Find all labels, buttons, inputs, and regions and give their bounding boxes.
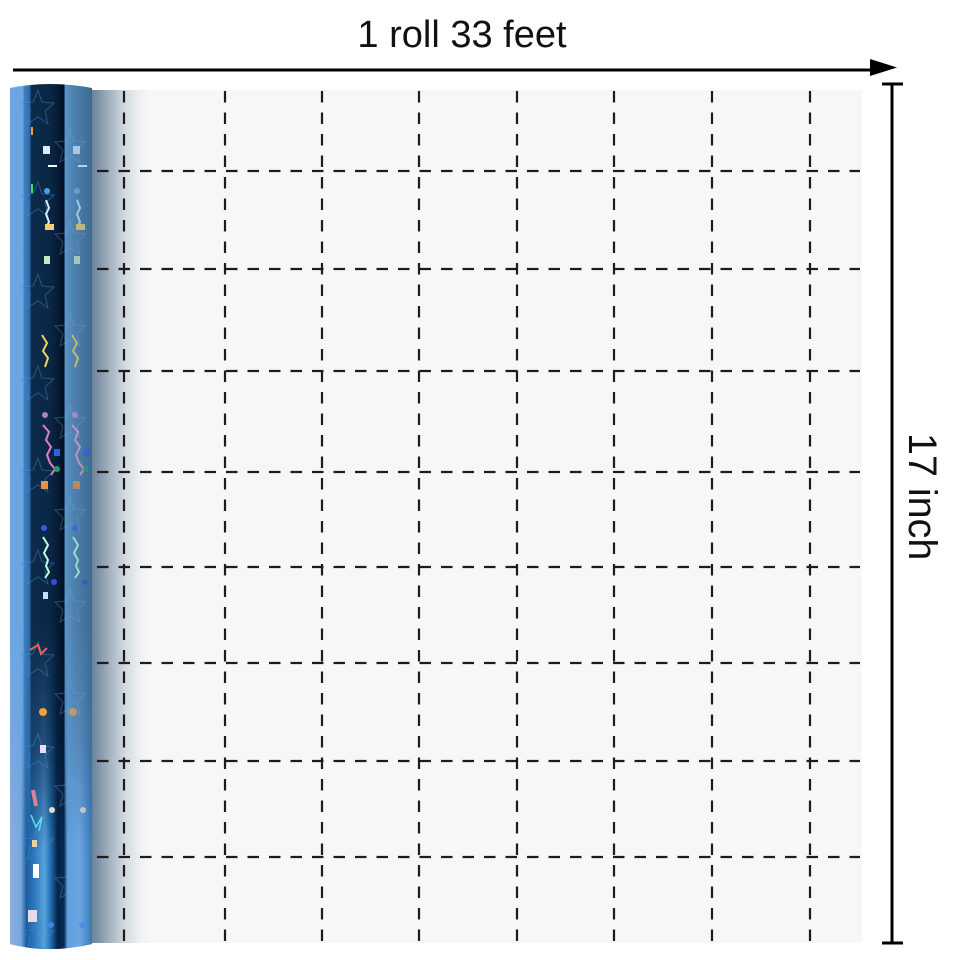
roll shadow on sheet bbox=[92, 90, 152, 943]
sparkles, rear column bbox=[69, 146, 90, 928]
sheet background bbox=[92, 90, 862, 943]
arrow: length bbox=[13, 59, 897, 76]
dashed grid bbox=[97, 91, 860, 943]
vertical cut lines bbox=[124, 91, 810, 943]
label: roll width: 17 inch bbox=[900, 433, 944, 560]
bracket: width bbox=[882, 82, 903, 944]
holographic blue roll bbox=[10, 80, 92, 955]
title: roll length: 1 roll 33 feet bbox=[357, 14, 567, 56]
horizontal cut lines bbox=[97, 171, 860, 857]
sparkles, front column bbox=[28, 127, 60, 928]
